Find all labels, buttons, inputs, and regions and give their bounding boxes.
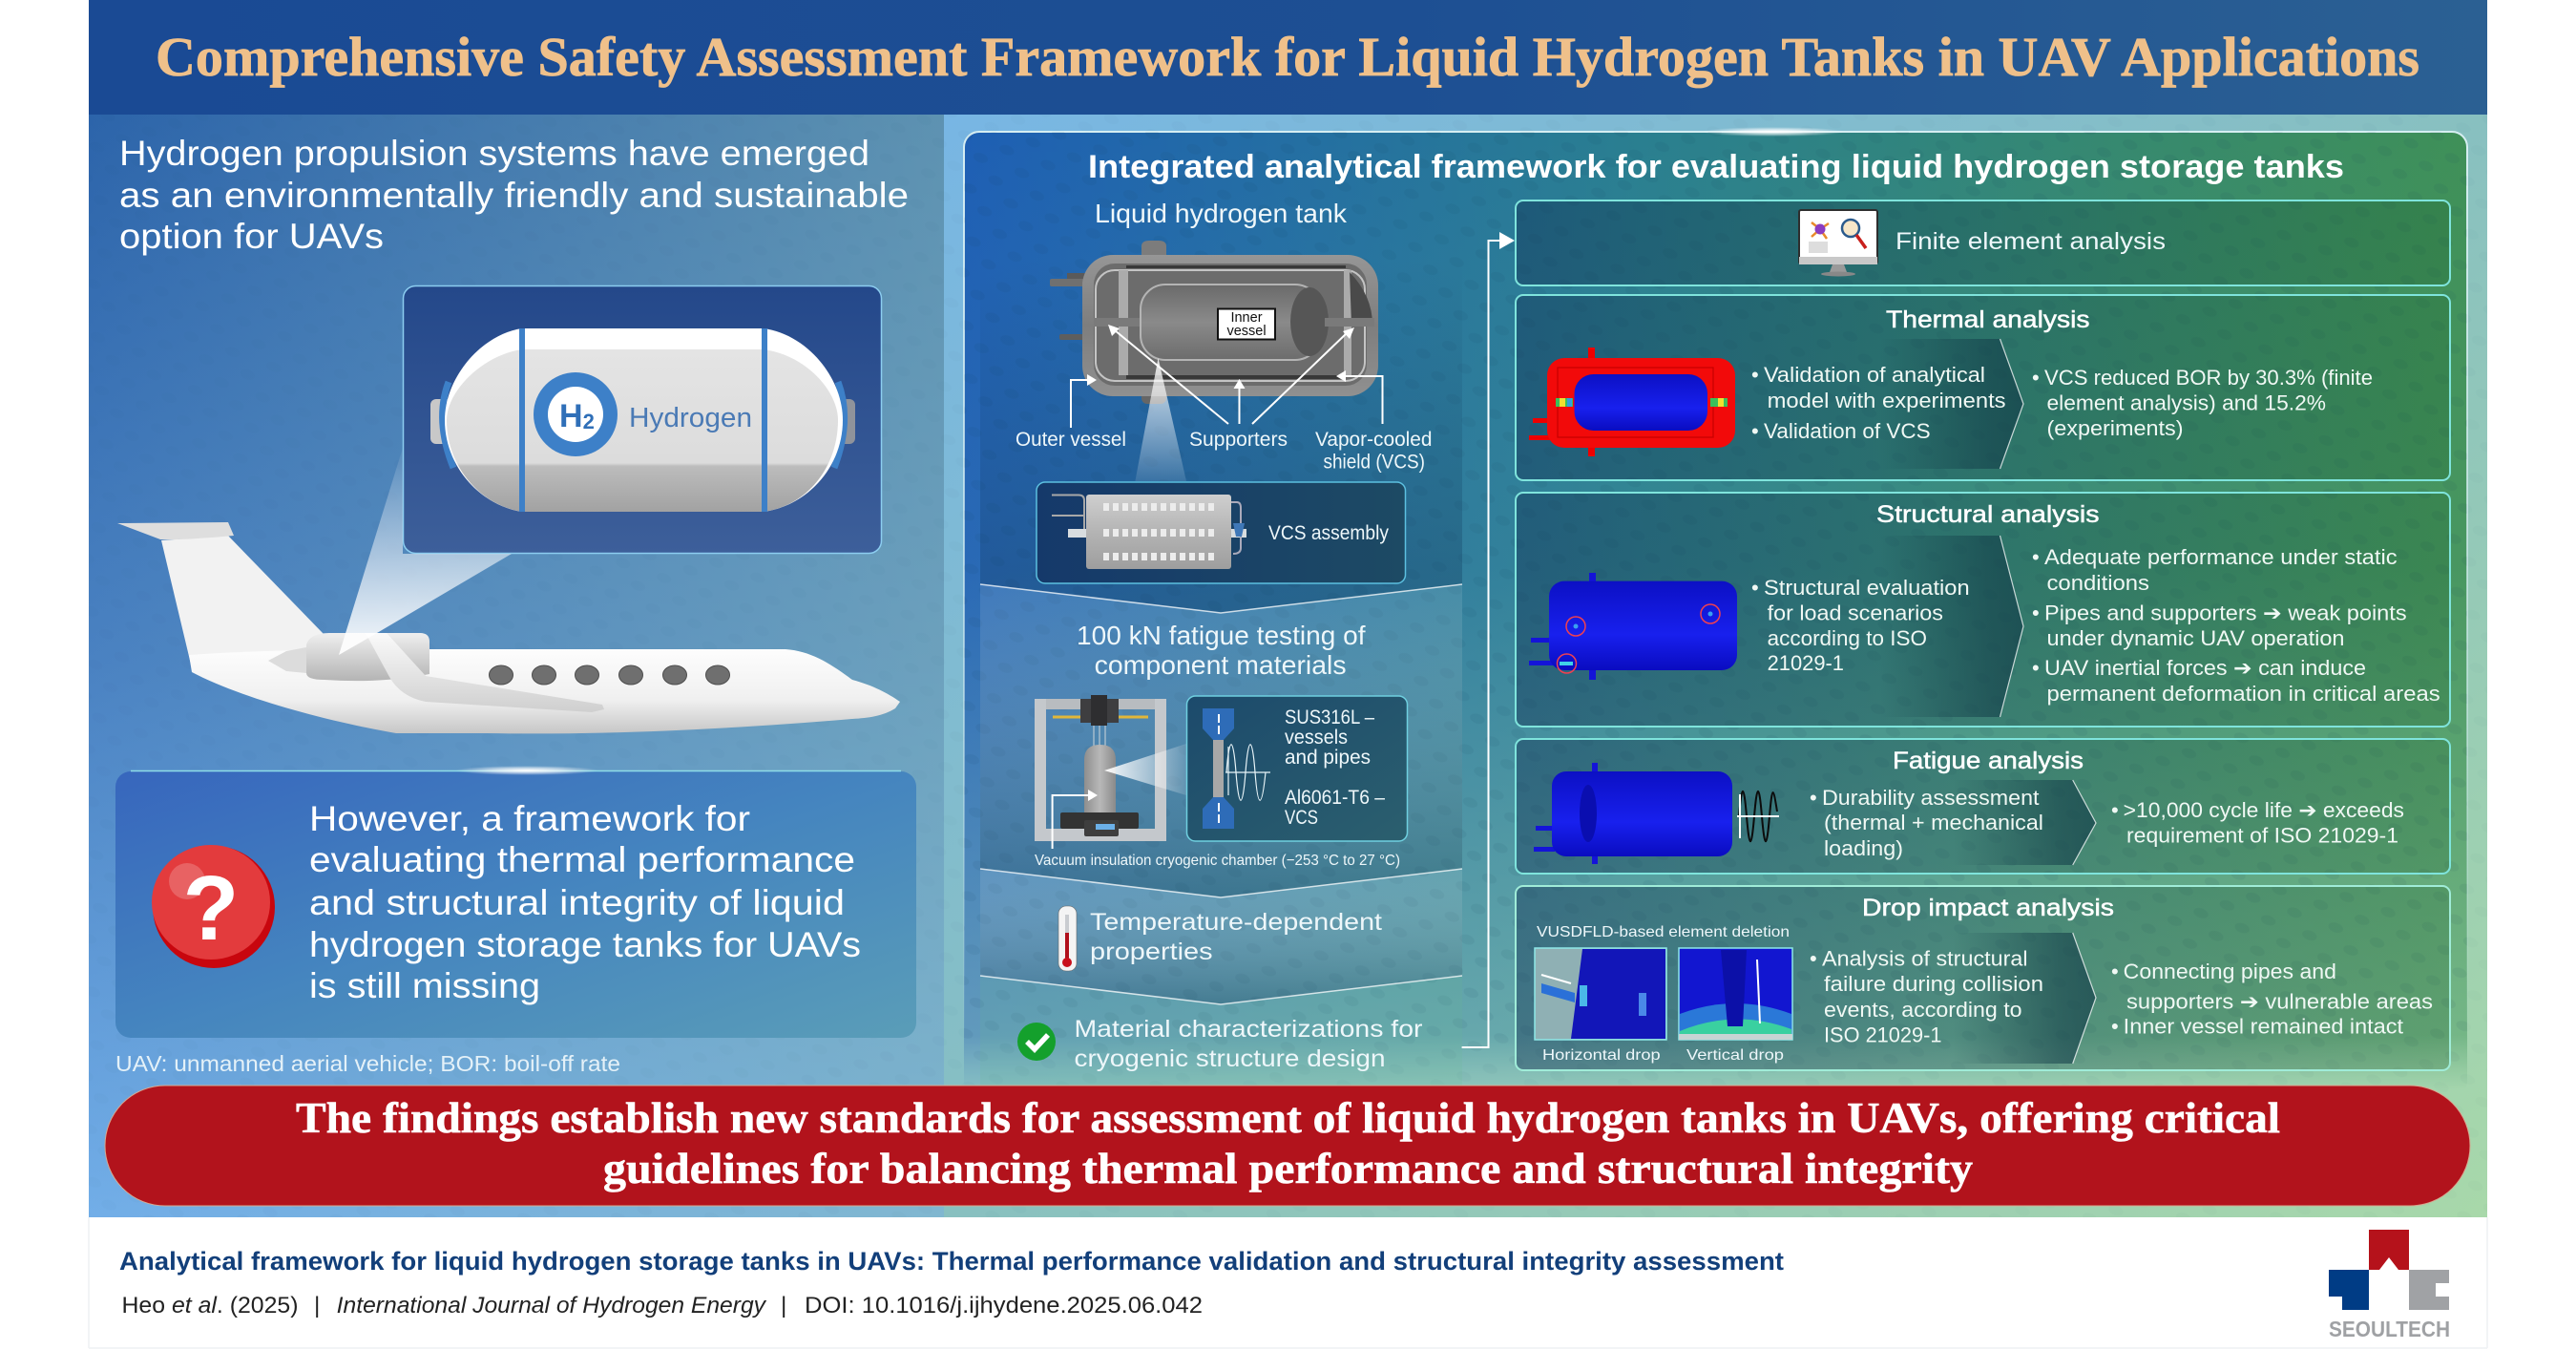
drop analysis methods: failure during collision (1824, 972, 2043, 996)
illustration: stress contour tank (1529, 573, 1737, 680)
drop analysis results: Inner vessel remained intact (2124, 1015, 2403, 1039)
panel: drop impact analysis: VUSDFLD-based element deletion (1537, 924, 1790, 940)
citation line: DOI: 10.1016/j.ijhydene.2025.06.042 (805, 1293, 1203, 1318)
paper title: Analytical framework for liquid hydrogen storage tanks in UAVs: Thermal performance validation and structural integrity assessment (119, 1247, 1784, 1276)
heading: liquid hydrogen tank: Liquid hydrogen tank (1095, 199, 1348, 228)
logo: SeoulTech (2329, 1230, 2450, 1341)
aircraft windows (489, 665, 729, 685)
intro text block: Hydrogen propulsion systems have emerged (119, 134, 869, 173)
drop analysis methods: • (1810, 947, 1817, 971)
fatigue analysis methods (1810, 786, 2043, 860)
heading: fatigue testing: component materials (1095, 650, 1347, 680)
gap statement (309, 799, 861, 1005)
header banner (89, 0, 2487, 115)
icon: question mark: ? (183, 857, 239, 960)
tank part labels: Outer vessel (1016, 429, 1126, 451)
drop analysis methods: ISO 21029-1 (1824, 1023, 1941, 1047)
structural analysis results: permanent deformation in critical areas (2046, 682, 2440, 706)
callout beam to VCS assembly (1135, 358, 1186, 481)
drop analysis results: supporters ➔ vulnerable areas (2126, 990, 2433, 1014)
citation line: | (781, 1293, 786, 1318)
citation line: International Journal of Hydrogen Energy (337, 1293, 767, 1318)
drop image captions: Vertical drop (1686, 1047, 1784, 1064)
leader arrows: tank parts (1071, 325, 1382, 428)
panel: tested materials (1187, 696, 1407, 841)
icon: hydrogen tank body (445, 328, 843, 512)
callout beam to specimen (1104, 744, 1186, 795)
image: horizontal drop simulation (1535, 948, 1666, 1040)
icon: question mark (152, 845, 275, 968)
arrow: workflow to finite element analysis (1462, 232, 1515, 1047)
material labels: Al6061-T6 – (1285, 787, 1385, 809)
citation line (122, 1293, 1203, 1318)
illustration: cutaway tank (1050, 241, 1378, 404)
structural analysis results: • (2032, 601, 2040, 625)
panel: structural analysis (1516, 493, 2450, 727)
panel: research gap (115, 766, 916, 1038)
column: material workflow (980, 199, 1462, 1088)
tank part labels (1016, 429, 1432, 474)
icon: monitor (1799, 210, 1877, 277)
structural analysis results: under dynamic UAV operation (2046, 626, 2344, 650)
panel: structural analysis: Structural analysis (1876, 501, 2100, 528)
material labels: vessels (1285, 727, 1348, 749)
panel: thermal analysis (1516, 295, 2450, 480)
panel: fatigue analysis: Fatigue analysis (1893, 748, 2084, 774)
structural analysis methods: 21029-1 (1768, 651, 1844, 675)
label: inner vessel: vessel (1226, 324, 1267, 339)
intro text block: option for UAVs (119, 217, 384, 256)
heading: fatigue testing: 100 kN fatigue testing of (1077, 621, 1366, 650)
conclusion banner: The findings establish new standards for assessment of liquid hydrogen tanks in UAVs, offering critical (296, 1093, 2280, 1142)
drop image captions: Horizontal drop (1542, 1047, 1661, 1064)
thermal analysis methods: • (1751, 419, 1759, 443)
citation line: | (314, 1293, 320, 1318)
illustration: VCS assembly (1052, 495, 1246, 569)
structural analysis results (2032, 545, 2440, 706)
icon: cyclic load wave (1225, 745, 1270, 800)
heading: fatigue testing (1077, 621, 1366, 680)
caption: cryogenic chamber: Vacuum insulation cryogenic chamber (−253 °C to 27 °C) (1035, 853, 1400, 869)
drop analysis results: • (2111, 1015, 2119, 1039)
thermal analysis results: element analysis) and 15.2% (2046, 391, 2326, 414)
text: temperature-dependent properties: Temperature-dependent (1090, 909, 1382, 936)
image: vertical drop simulation (1679, 948, 1792, 1040)
fatigue analysis results: >10,000 cycle life ➔ exceeds (2124, 798, 2404, 822)
thermal analysis methods: Validation of analytical (1764, 363, 1985, 387)
panel: VCS assembly: VCS assembly (1268, 522, 1389, 544)
panel: drop impact analysis: Drop impact analysis (1862, 895, 2114, 921)
fatigue analysis methods: Durability assessment (1822, 786, 2039, 810)
callout beam to tank inset (339, 448, 512, 655)
inset panel: hydrogen tank: Hydrogen (629, 403, 752, 433)
structural analysis results: UAV inertial forces ➔ can induce (2044, 656, 2366, 680)
gap statement: However, a framework for (309, 799, 750, 838)
structural analysis results: conditions (2046, 571, 2149, 595)
tank part labels: Supporters (1189, 429, 1288, 451)
material labels: and pipes (1285, 747, 1371, 769)
material labels (1285, 707, 1385, 829)
footer: citation (119, 1247, 1784, 1318)
title: Comprehensive Safety Assessment Framework for Liquid Hydrogen Tanks in UAV Applications (156, 26, 2419, 88)
stress hot-spot markers (1558, 604, 1720, 673)
thermal analysis results: • (2032, 366, 2040, 390)
text: material characterizations: cryogenic structure design (1075, 1045, 1386, 1072)
structural analysis methods: for load scenarios (1768, 601, 1943, 625)
thermal analysis results (2032, 366, 2373, 440)
drop analysis methods: Analysis of structural (1822, 947, 2028, 971)
drop analysis results: Connecting pipes and (2124, 960, 2336, 983)
structural analysis results: Pipes and supporters ➔ weak points (2044, 601, 2407, 625)
drop analysis results: • (2111, 960, 2119, 983)
drop analysis results (2111, 960, 2433, 1039)
conclusion banner (105, 1086, 2470, 1206)
panel: VCS assembly (1037, 482, 1405, 583)
abbreviations footnote: UAV: unmanned aerial vehicle; BOR: boil-off rate (115, 1051, 620, 1076)
drop analysis methods: events, according to (1824, 998, 2022, 1022)
illustration: thermal contour tank (1529, 348, 1735, 456)
logo: SeoulTech: SEOULTECH (2329, 1317, 2450, 1341)
fatigue analysis methods: (thermal + mechanical (1824, 811, 2043, 834)
icon: cyclic load wave (1737, 791, 1779, 841)
icon: dogbone specimen (1203, 708, 1234, 829)
text: material characterizations (1075, 1016, 1422, 1072)
fatigue analysis results: requirement of ISO 21029-1 (2126, 824, 2398, 848)
structural analysis results: • (2032, 656, 2040, 680)
text: material characterizations: Material characterizations for (1075, 1016, 1422, 1043)
icon: thermometer (1058, 906, 1077, 971)
tank part labels: shield (VCS) (1323, 451, 1425, 474)
structural analysis methods: • (1751, 576, 1759, 600)
icon: tank end caps (430, 382, 855, 468)
gap statement: and structural integrity of liquid (309, 883, 845, 922)
structural analysis results: Adequate performance under static (2044, 545, 2398, 569)
structural analysis methods: Structural evaluation (1764, 576, 1970, 600)
illustration: aircraft (117, 522, 900, 733)
thermal analysis methods: model with experiments (1768, 389, 2006, 412)
gap statement: hydrogen storage tanks for UAVs (309, 925, 861, 964)
thermal analysis methods: • (1751, 363, 1759, 387)
structural analysis results: • (2032, 545, 2040, 569)
panel: finite element analysis (1516, 200, 2450, 285)
illustration: fatigue test machine (1035, 695, 1166, 841)
icon: H2 badge: H (559, 398, 583, 434)
panel: integrated analytical framework (964, 127, 2467, 1096)
label: inner vessel: Inner (1230, 310, 1263, 326)
fatigue analysis results (2111, 798, 2404, 848)
conclusion banner: guidelines for balancing thermal performance and structural integrity (603, 1144, 1973, 1192)
icon: check mark (1017, 1023, 1056, 1061)
structural analysis methods: according to ISO (1768, 626, 1927, 650)
icon: H2 badge: 2 (583, 410, 595, 433)
thermal analysis results: VCS reduced BOR by 30.3% (finite (2044, 366, 2373, 390)
illustration: fatigue tank (1534, 763, 1732, 864)
inset panel: hydrogen tank (403, 286, 882, 554)
thermal analysis methods (1751, 363, 2006, 443)
citation line: Heo et al. (2025) (122, 1293, 298, 1318)
drop analysis methods (1810, 947, 2043, 1047)
panel: thermal analysis: Thermal analysis (1886, 306, 2090, 333)
gap statement: is still missing (309, 966, 540, 1005)
framework heading: Integrated analytical framework for evaluating liquid hydrogen storage tanks (1088, 149, 2344, 185)
leader arrow: chamber (1053, 790, 1098, 849)
fatigue analysis methods: • (1810, 786, 1817, 810)
panel: drop impact analysis (1516, 886, 2450, 1070)
icon: H2 badge (534, 372, 618, 456)
thermal analysis methods: Validation of VCS (1764, 419, 1931, 443)
intro text block (119, 134, 909, 256)
panel: finite element analysis: Finite element analysis (1895, 228, 2166, 255)
material labels: SUS316L – (1285, 707, 1374, 728)
gap statement: evaluating thermal performance (309, 840, 855, 879)
panel: fatigue analysis (1516, 739, 2450, 874)
structural analysis methods (1751, 576, 1970, 675)
tank part labels: Vapor-cooled (1315, 429, 1432, 451)
text: temperature-dependent properties: properties (1090, 939, 1213, 965)
material labels: VCS (1285, 807, 1318, 829)
panel: left introduction (115, 134, 916, 1076)
drop image captions (1542, 1047, 1784, 1064)
fatigue analysis methods: loading) (1824, 836, 1903, 860)
text: temperature-dependent properties (1090, 909, 1382, 965)
thermal analysis results: (experiments) (2046, 416, 2184, 440)
fatigue analysis results: • (2111, 798, 2119, 822)
label: inner vessel (1218, 309, 1275, 340)
intro text block: as an environmentally friendly and sustainable (119, 176, 909, 215)
